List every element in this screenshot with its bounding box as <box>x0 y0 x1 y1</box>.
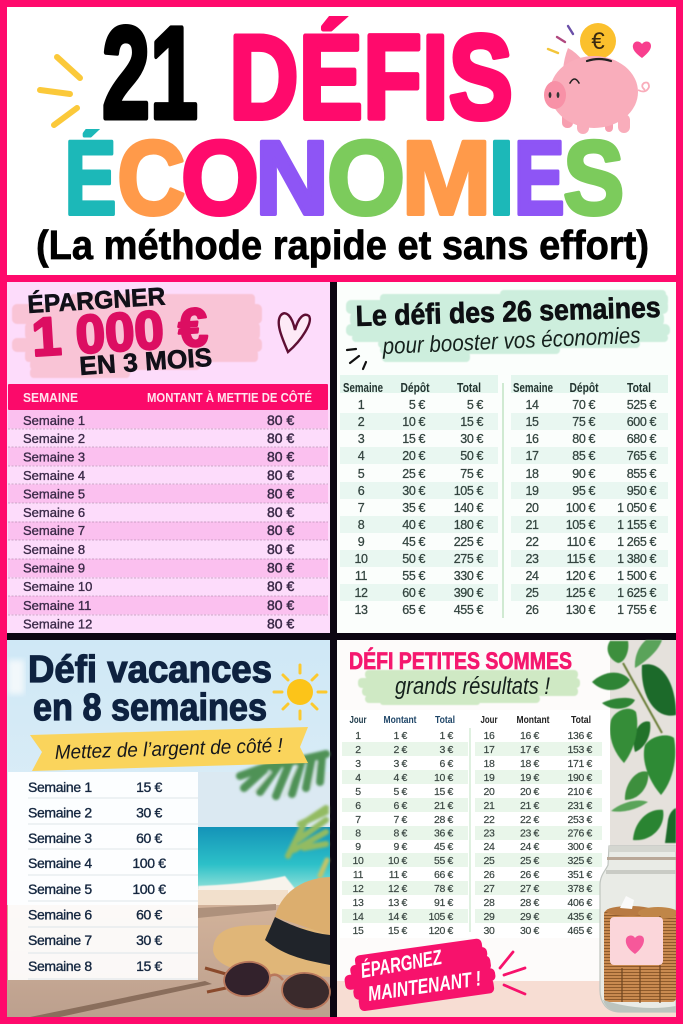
black dividers <box>7 282 676 1017</box>
table: days 1 to 30: 7 <box>355 814 361 826</box>
table: weeks 14 to 26: 23 <box>525 552 539 566</box>
table: 8 weeks: 60 € <box>136 906 162 922</box>
table: 12 weeks: 80 € <box>267 597 294 613</box>
table: weeks 14 to 26: 600 € <box>627 415 656 429</box>
table: days 1 to 30: 8 <box>355 828 361 840</box>
pink separator <box>0 275 683 282</box>
panel: défi vacances <box>7 640 332 1017</box>
table: weeks 14 to 26: 105 € <box>566 518 595 532</box>
table: weeks 1 to 13: Dépôt <box>400 381 430 395</box>
table: weeks 1 to 13: 5 € <box>409 398 425 412</box>
table: days 1 to 30: Montant <box>384 714 417 726</box>
table header <box>8 384 328 410</box>
icon: sun <box>274 665 326 719</box>
table: days 1 to 30: 465 € <box>567 925 593 937</box>
table: days 1 to 30: 25 <box>484 855 495 867</box>
table: days 1 to 30: 23 € <box>520 828 539 840</box>
table: weeks 1 to 13: 5 € <box>467 398 483 412</box>
table: weeks 1 to 13: 20 € <box>402 449 425 463</box>
table: weeks 14 to 26: 765 € <box>627 449 656 463</box>
table: weeks 1 to 13: 225 € <box>454 535 483 549</box>
table: days 1 to 30: 6 <box>355 800 361 812</box>
table: weeks 14 to 26: 25 <box>525 586 539 600</box>
title line: ÉCONOMIES: M <box>402 120 492 237</box>
icon: heart outline <box>279 313 310 352</box>
call to action: épargnez maintenant: MAINTENANT ! <box>366 967 483 1006</box>
table: weeks 1 to 13: 3 <box>358 432 365 446</box>
table: 12 weeks: Semaine 9 <box>23 560 85 576</box>
table: weeks 14 to 26: 26 <box>525 603 539 617</box>
table: weeks 1 to 13: 6 <box>358 484 365 498</box>
table: days 1 to 30: 21 <box>484 800 495 812</box>
title line: ÉCONOMIES: O <box>327 120 405 237</box>
table: days 1 to 30: 10 <box>353 855 364 867</box>
table: 12 weeks: Semaine 6 <box>23 505 85 520</box>
table: weeks 14 to 26: 1 380 € <box>617 552 656 566</box>
table: weeks 1 to 13: 2 <box>358 415 365 429</box>
table: days 1 to 30: 29 € <box>520 911 539 923</box>
table: days 1 to 30: 15 € <box>434 786 453 798</box>
table: days 1 to 30: 14 € <box>388 911 407 923</box>
table: weeks 14 to 26: 950 € <box>627 484 656 498</box>
table: days 1 to 30: 26 € <box>520 869 539 881</box>
table: days 1 to 30: 300 € <box>567 841 593 853</box>
table: days 1 to 30: 19 € <box>520 772 539 784</box>
table: weeks 1 to 13: 30 € <box>460 432 483 446</box>
table: weeks 14 to 26: 525 € <box>627 398 656 412</box>
table: weeks 1 to 13: 40 € <box>402 518 425 532</box>
table: days 1 to 30: 22 € <box>520 814 539 826</box>
title line: ÉCONOMIES: E <box>514 120 565 237</box>
table: weeks 1 to 13: 45 € <box>402 535 425 549</box>
banner: mettez de l'argent de côté <box>30 727 308 771</box>
table: days 1 to 30: 378 € <box>567 883 593 895</box>
table: days 1 to 30: Total <box>435 714 455 726</box>
table: days 1 to 30: 3 € <box>393 758 408 770</box>
table: weeks 14 to 26: 19 <box>525 484 539 498</box>
table: 8 weeks <box>8 772 198 980</box>
table: 12 weeks: Semaine 5 <box>23 486 85 502</box>
table: weeks 14 to 26: 1 625 € <box>617 586 656 600</box>
table: weeks 14 to 26: 80 € <box>572 432 595 446</box>
title line: ÉCONOMIES <box>68 129 622 217</box>
sunglasses <box>205 959 332 1011</box>
title line: ÉCONOMIES: I <box>488 120 514 237</box>
icon: pink heart <box>633 41 651 58</box>
table: 12 weeks: Semaine 11 <box>23 598 91 613</box>
table: days 1 to 30: 18 <box>484 758 495 770</box>
subheading: pour booster vos économies: pour booster vos économies <box>381 322 641 359</box>
table: 12 weeks: 80 € <box>267 560 294 576</box>
table: days 1 to 30: 16 € <box>520 730 539 742</box>
table: 12 weeks: Semaine 1 <box>23 413 85 428</box>
icon: black dashes <box>347 349 366 369</box>
table: 8 weeks: 15 € <box>136 958 162 974</box>
table: days 1 to 30: 8 € <box>393 828 408 840</box>
table: weeks 14 to 26 <box>511 375 668 617</box>
table header: MONTANT À METTIE DE CÔTÉ <box>147 390 312 405</box>
heading: épargner 1000 € en 3 mois: ÉPARGNER <box>27 282 166 319</box>
title line: ÉCONOMIES: O <box>181 120 259 237</box>
table: weeks 14 to 26: 120 € <box>566 569 595 583</box>
table: weeks 1 to 13: 25 € <box>402 467 425 481</box>
table: weeks 1 to 13: 5 <box>358 467 365 481</box>
table: weeks 14 to 26: Dépôt <box>570 381 599 395</box>
table: weeks 1 to 13: 10 € <box>402 415 425 429</box>
table: days 1 to 30: 25 € <box>520 855 539 867</box>
table: weeks 1 to 13 <box>340 375 498 617</box>
heading: défi vacances en 8 semaines <box>28 649 272 729</box>
table: weeks 14 to 26: 70 € <box>572 398 595 412</box>
green brush subheading background <box>358 670 580 705</box>
title line: 21 DÉFIS: DÉFIS <box>229 10 513 144</box>
table: days 1 to 30: 351 € <box>567 869 593 881</box>
beach photo scene <box>7 754 332 1017</box>
table: 12 weeks: Semaine 10 <box>23 579 92 594</box>
table: days 1 to 30: 30 <box>484 925 495 937</box>
table: weeks 1 to 13: 7 <box>358 501 365 515</box>
table: days 1 to 30: Jour <box>480 714 498 726</box>
table: 12 weeks: Semaine 7 <box>23 523 85 538</box>
table: 12 weeks <box>8 410 328 632</box>
table: weeks 14 to 26: 21 <box>525 518 539 532</box>
table: weeks 14 to 26: 24 <box>525 569 539 583</box>
table: weeks 1 to 13: Semaine <box>343 381 383 395</box>
table: days 1 to 30: 12 <box>353 883 364 895</box>
table: days 1 to 30: 105 € <box>428 911 454 923</box>
table: 8 weeks: Semaine 4 <box>28 855 92 871</box>
call to action: épargnez maintenant: ÉPARGNEZ <box>359 946 444 983</box>
title line: ÉCONOMIES: C <box>117 120 185 237</box>
table: days 1 to 30: 210 € <box>567 786 593 798</box>
table: days 1 to 30: 10 € <box>434 772 453 784</box>
table: weeks 1 to 13: 140 € <box>454 501 483 515</box>
table: days 1 to 30: 1 € <box>393 730 408 742</box>
table: weeks 1 to 13: 11 <box>355 569 368 583</box>
table: days 1 to 30: 3 <box>355 758 361 770</box>
table: days 1 to 30: 1 € <box>439 730 454 742</box>
heading: défi petites sommes: DÉFI PETITES SOMMES <box>349 647 572 675</box>
table: days 1 to 30: 4 € <box>393 772 408 784</box>
table: days 1 to 30: 7 € <box>393 814 408 826</box>
table: weeks 1 to 13: 1 <box>358 398 365 412</box>
table: days 1 to 30: 15 <box>353 925 364 937</box>
table: weeks 1 to 13: 10 <box>354 552 368 566</box>
table: 12 weeks: Semaine 2 <box>23 431 85 446</box>
table: 12 weeks: 80 € <box>267 522 294 538</box>
title line: ÉCONOMIES: É <box>64 120 116 237</box>
table: days 1 to 30: 406 € <box>567 897 593 909</box>
table: days 1 to 30: 13 € <box>388 897 407 909</box>
table: weeks 14 to 26: Total <box>627 381 651 395</box>
table: weeks 14 to 26: 17 <box>525 449 539 463</box>
title line: ÉCONOMIES: N <box>255 120 329 237</box>
table: weeks 1 to 13: 35 € <box>402 501 425 515</box>
table: days 1 to 30: 18 € <box>520 758 539 770</box>
table: days 1 to 30: 55 € <box>434 855 453 867</box>
table: weeks 14 to 26: 22 <box>525 535 539 549</box>
table: 8 weeks: 100 € <box>132 855 166 871</box>
table: 12 weeks: Semaine 12 <box>23 616 92 632</box>
panel: défi 26 semaines <box>337 282 676 633</box>
table: days 1 to 30: 23 <box>484 828 495 840</box>
table: days 1 to 30: 24 € <box>520 841 539 853</box>
table: days 1 to 30: 36 € <box>434 828 453 840</box>
table: days 1 to 30: 136 € <box>567 730 593 742</box>
table: weeks 1 to 13: 4 <box>358 449 365 463</box>
table: weeks 1 to 13: 390 € <box>454 586 483 600</box>
table: 12 weeks: 80 € <box>267 467 294 483</box>
table: weeks 14 to 26: 1 500 € <box>617 569 656 583</box>
table: 8 weeks: 100 € <box>132 881 166 897</box>
table: weeks 14 to 26: 130 € <box>566 603 595 617</box>
table: days 1 to 30: 6 € <box>393 800 408 812</box>
table: weeks 14 to 26: 855 € <box>627 467 656 481</box>
table: weeks 14 to 26: 1 265 € <box>617 535 656 549</box>
table: 8 weeks: 30 € <box>136 804 162 820</box>
panel: défi petites sommes <box>337 640 678 1017</box>
table: weeks 14 to 26: 680 € <box>627 432 656 446</box>
table: weeks 14 to 26: 85 € <box>572 449 595 463</box>
table: 12 weeks: Semaine 3 <box>23 450 85 464</box>
table: days 1 to 30: 120 € <box>428 925 454 937</box>
table: days 1 to 30: Total <box>571 714 591 726</box>
table: weeks 1 to 13: 330 € <box>454 569 483 583</box>
table: days 1 to 30: 20 € <box>520 786 539 798</box>
table: weeks 1 to 13: 455 € <box>454 603 483 617</box>
table: days 1 to 30: 171 € <box>567 758 593 770</box>
table: 8 weeks: Semaine 8 <box>28 958 92 974</box>
table: days 1 to 30: 30 € <box>520 925 539 937</box>
table: days 1 to 30: 91 € <box>434 897 453 909</box>
table: days 1 to 30: 231 € <box>567 800 593 812</box>
heading: épargner 1000 € en 3 mois: 1 000 € <box>30 297 209 368</box>
title line: 21 DÉFIS <box>103 16 512 122</box>
table: days 1 to 30: 13 <box>353 897 364 909</box>
table: days 1 to 30: 26 <box>484 869 495 881</box>
table: days 1 to 30: 15 € <box>388 925 407 937</box>
table: 8 weeks: Semaine 7 <box>28 932 92 948</box>
table: weeks 1 to 13: 275 € <box>454 552 483 566</box>
table: weeks 1 to 13: 30 € <box>402 484 425 498</box>
table: days 1 to 30: Montant <box>516 714 550 726</box>
table: 8 weeks: 15 € <box>136 779 162 795</box>
table: 12 weeks: Semaine 8 <box>23 542 85 557</box>
table: 12 weeks: 80 € <box>267 504 294 520</box>
table: days 1 to 30: 2 <box>355 744 361 756</box>
table: days 1 to 30: 12 € <box>388 883 407 895</box>
table: days 1 to 30: 21 € <box>434 800 453 812</box>
table: days 1 to 30: 2 € <box>393 744 408 756</box>
table: days 1 to 30: 78 € <box>434 883 453 895</box>
table: days 1 to 30: 16 <box>484 730 495 742</box>
table: weeks 1 to 13: 50 € <box>460 449 483 463</box>
table: days 1 to 30: 5 <box>355 786 361 798</box>
table: days 1 to 30: Jour <box>350 714 366 726</box>
heading: défi vacances en 8 semaines: en 8 semaines <box>33 687 267 729</box>
table: weeks 1 to 13: 8 <box>358 518 365 532</box>
heading: défi vacances en 8 semaines: Défi vacances <box>28 649 272 691</box>
banner: mettez de l'argent de côté: Mettez de l’argent de côté ! <box>54 735 283 764</box>
table: 8 weeks: Semaine 2 <box>28 804 92 820</box>
table: days 1 to 30: 325 € <box>567 855 593 867</box>
icon: piggy bank with coin <box>544 23 649 134</box>
table: weeks 14 to 26: 125 € <box>566 586 595 600</box>
table: days 1 to 30: 253 € <box>567 814 593 826</box>
table: days 1 to 30: 11 € <box>389 869 408 881</box>
table: days 1 to 30: 66 € <box>434 869 453 881</box>
table: days 1 to 30: 28 <box>484 897 495 909</box>
table: weeks 1 to 13: 9 <box>358 535 365 549</box>
table: days 1 to 30: 6 € <box>439 758 454 770</box>
table: days 1 to 30: 17 <box>484 744 495 756</box>
table: weeks 1 to 13: 50 € <box>402 552 425 566</box>
table: days 1 to 30: 435 € <box>567 911 593 923</box>
palm fronds <box>240 754 327 876</box>
table: 12 weeks: 80 € <box>267 448 294 464</box>
subheading: grands résultats: grands résultats ! <box>395 673 550 700</box>
table: days 1 to 30: 5 € <box>393 786 408 798</box>
panel: épargner 1000 € <box>7 282 330 633</box>
table: days 1 to 30: 17 € <box>520 744 539 756</box>
table: 12 weeks: 80 € <box>267 578 294 594</box>
table: weeks 14 to 26: 1 050 € <box>617 501 656 515</box>
jar label with heart <box>610 917 663 965</box>
table: weeks 14 to 26: 1 155 € <box>617 518 656 532</box>
table: 12 weeks: 80 € <box>267 430 294 446</box>
plant leaves <box>592 640 676 843</box>
table: weeks 14 to 26: 20 <box>525 501 539 515</box>
table: days 1 to 30: 9 <box>355 841 361 853</box>
table: days 1 to 30: 11 <box>353 869 364 881</box>
icon: pink rays <box>500 952 525 994</box>
table: days 1 to 30: 276 € <box>567 828 593 840</box>
jar of coins <box>600 846 678 1012</box>
table: weeks 1 to 13: 13 <box>354 603 368 617</box>
table: days 1 to 30: 153 € <box>567 744 593 756</box>
table: weeks 1 to 13: 75 € <box>460 467 483 481</box>
table: weeks 1 to 13: 180 € <box>454 518 483 532</box>
table: days 1 to 30: 22 <box>484 814 495 826</box>
table: 8 weeks: Semaine 6 <box>28 906 92 922</box>
table: 8 weeks: Semaine 5 <box>28 881 92 897</box>
table: weeks 1 to 13: 15 € <box>460 415 483 429</box>
heading: épargner 1000 € en 3 mois: EN 3 MOIS <box>78 342 213 381</box>
pink brush heading background <box>12 294 262 378</box>
table: 8 weeks: 60 € <box>136 830 162 846</box>
table: weeks 14 to 26: Semaine <box>513 381 553 395</box>
table: 12 weeks: 80 € <box>267 616 294 632</box>
table: weeks 14 to 26: 100 € <box>566 501 595 515</box>
title line: ÉCONOMIES: S <box>563 120 624 237</box>
subtitle: (La méthode rapide et sans effort) <box>36 222 649 268</box>
icon: piggy bank with coin: € <box>591 28 605 55</box>
table: days 1 to 30: 29 <box>484 911 495 923</box>
title line: 21 DÉFIS: 21 <box>102 0 198 146</box>
table: 12 weeks: 80 € <box>267 486 294 502</box>
table: days 1 to 30 <box>340 710 610 938</box>
table: weeks 14 to 26: 110 € <box>567 535 595 549</box>
table: days 1 to 30: 45 € <box>434 841 453 853</box>
table: days 1 to 30: 20 <box>484 786 495 798</box>
table: 8 weeks: Semaine 1 <box>28 779 92 795</box>
table: days 1 to 30: 28 € <box>520 897 539 909</box>
table: days 1 to 30: 21 € <box>520 800 539 812</box>
table: days 1 to 30: 24 <box>484 841 495 853</box>
table: 8 weeks: Semaine 3 <box>28 830 92 846</box>
table: days 1 to 30: 10 € <box>388 855 407 867</box>
table: days 1 to 30: 3 € <box>439 744 454 756</box>
table: days 1 to 30: 19 <box>484 772 495 784</box>
table: weeks 14 to 26: 14 <box>525 398 539 412</box>
call to action: épargnez maintenant <box>341 937 525 1013</box>
heading: le défi des 26 semaines: Le défi des 26 semaines <box>355 292 661 333</box>
table: days 1 to 30: 27 <box>484 883 495 895</box>
table: weeks 14 to 26: 1 755 € <box>617 603 656 617</box>
table: weeks 1 to 13: 15 € <box>402 432 425 446</box>
table: weeks 1 to 13: 60 € <box>402 586 425 600</box>
table: weeks 14 to 26: 90 € <box>572 467 595 481</box>
panel: title header <box>7 0 676 275</box>
table: weeks 14 to 26: 115 € <box>567 552 595 566</box>
table: 8 weeks: 30 € <box>136 932 162 948</box>
table: weeks 1 to 13: 65 € <box>402 603 425 617</box>
table: days 1 to 30: 14 <box>353 911 364 923</box>
straw hat <box>213 877 330 977</box>
icon: yellow rays <box>40 57 80 125</box>
table: 12 weeks: 80 € <box>267 541 294 557</box>
table: days 1 to 30: 190 € <box>567 772 593 784</box>
heading: épargner 1000 € en 3 mois <box>27 282 213 381</box>
table: weeks 1 to 13: 105 € <box>454 484 483 498</box>
table: days 1 to 30: 9 € <box>393 841 408 853</box>
table: days 1 to 30: 28 € <box>434 814 453 826</box>
table: 12 weeks: Semaine 4 <box>23 468 85 483</box>
table: days 1 to 30: 4 <box>355 772 361 784</box>
table: days 1 to 30: 27 € <box>520 883 539 895</box>
table: weeks 14 to 26: 95 € <box>572 484 595 498</box>
table: weeks 1 to 13: 55 € <box>402 569 425 583</box>
table header: SEMAINE <box>23 391 78 405</box>
table: days 1 to 30: 1 <box>355 730 361 742</box>
bottom and side pink border <box>0 640 683 1024</box>
table: weeks 14 to 26: 75 € <box>572 415 595 429</box>
table: weeks 14 to 26: 18 <box>525 467 539 481</box>
table: weeks 14 to 26: 16 <box>525 432 539 446</box>
table: weeks 14 to 26: 15 <box>525 415 539 429</box>
green brush heading background <box>346 290 670 362</box>
table: 12 weeks: 80 € <box>267 412 294 428</box>
table: weeks 1 to 13: 12 <box>354 586 368 600</box>
table: weeks 1 to 13: Total <box>457 381 481 395</box>
